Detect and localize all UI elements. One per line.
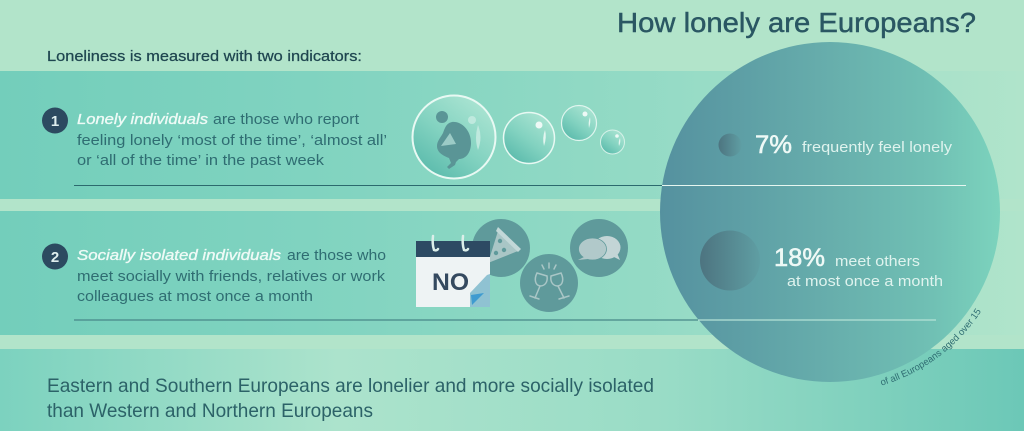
divider line 1 [74,184,966,186]
icon: calendar NO [416,236,490,307]
definition text 2: Socially isolated individuals [77,247,282,264]
number badge 2 [42,244,68,270]
value 7%: 7% [755,131,792,159]
large circle [660,42,1000,382]
band: indicator 2 [0,211,1024,335]
definition text 1: or ‘all of the time’ in the past week [77,152,325,169]
title: How lonely are Europeans? [617,7,976,38]
definition text 2: colleagues at most once a month [77,288,313,305]
indicator 2 [42,244,386,305]
value 18%: 18% [774,244,825,272]
definition text 1: Lonely individuals [77,111,209,128]
dot 7% [718,134,742,156]
divider line 2 [74,319,936,321]
definition text 2: meet socially with friends, relatives or work [77,268,386,285]
heading: indicators intro: Loneliness is measured with two indicators: [47,48,362,65]
dot 18% [700,230,760,290]
icon: calendar NO: NO [432,269,469,296]
stat: 7% [718,131,953,159]
band: indicator 1 [0,71,1024,199]
number badge 1 [42,108,68,134]
band: bottom summary [0,349,1024,431]
icon: pizza circle [472,219,530,277]
definition text 1: are those who report [213,111,360,128]
bubble with person [412,96,496,178]
bubble 4 [600,130,624,154]
label 18%: at most once a month [787,274,943,290]
number badge 2: 2 [51,249,59,266]
definition text 1 [77,111,387,169]
icon: speech bubbles circle [570,219,628,277]
bubble 3 [562,106,596,140]
definition text 1: feeling lonely ‘most of the time’, ‘almost all’ [77,132,387,149]
summary text: than Western and Northern Europeans [47,400,373,422]
summary text [47,375,654,422]
definition text 2: are those who [287,247,386,264]
number badge 1: 1 [51,113,59,130]
icon: person in bubbles [412,96,624,178]
label 18%: meet others [835,254,920,270]
label 7%: frequently feel lonely [802,140,953,156]
indicator 1 [42,108,387,169]
label 18% [787,254,943,290]
bubble 2 [504,112,554,164]
stat: 18% [700,230,943,290]
icon: toasting glasses circle [520,254,578,312]
definition text 2 [77,247,386,305]
curved note: of all Europeans aged over 15 [881,308,980,386]
summary text: Eastern and Southern Europeans are lonelier and more socially isolated [47,375,654,397]
